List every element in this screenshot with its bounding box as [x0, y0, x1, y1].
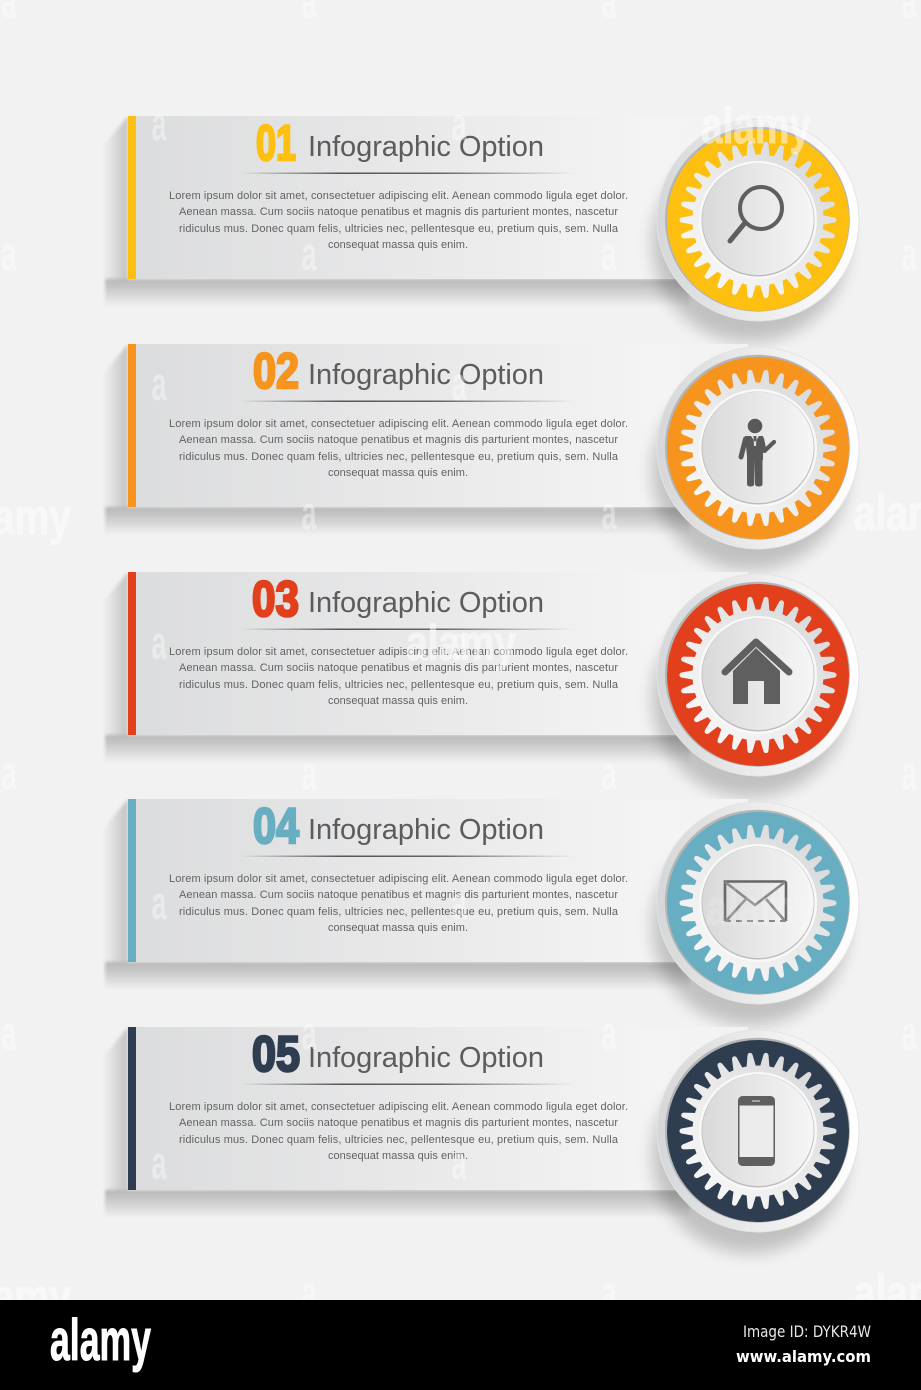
watermark letters: a — [2, 227, 17, 280]
watermark letters: a — [602, 746, 617, 799]
accent bar 1 — [128, 116, 136, 279]
row 5 — [103, 1026, 859, 1253]
accent bar 4 — [128, 799, 136, 962]
number 01: 01 — [256, 115, 296, 171]
body text 5: Lorem ipsum dolor sit amet, consectetuer adipiscing elit. Aenean commodo ligula eget dolor. — [169, 1101, 628, 1113]
panel: card 3 — [128, 572, 748, 735]
watermark words: alamy — [706, 880, 816, 936]
body text 3: consequat massa quis enim. — [328, 695, 468, 707]
row 3 — [103, 571, 859, 797]
panel: card 1 — [128, 116, 748, 279]
accent bar 5 — [128, 1027, 136, 1190]
watermark words: alamy — [406, 615, 516, 671]
row 2 — [103, 343, 859, 570]
watermark letters: a — [452, 616, 467, 669]
row 1 — [103, 115, 859, 342]
watermark letters: a — [152, 357, 167, 410]
watermark letters: a — [152, 97, 167, 150]
body text 1 — [169, 190, 628, 251]
body text 3: Lorem ipsum dolor sit amet, consectetuer adipiscing elit. Aenean commodo ligula eget dolor. — [169, 646, 628, 658]
watermark letters: a — [302, 1266, 317, 1319]
body text 4: ridiculus mus. Donec quam felis, ultricies nec, pellentesque eu, pretium quis, sem. Nulla — [179, 906, 619, 918]
body text 1: Lorem ipsum dolor sit amet, consectetuer adipiscing elit. Aenean commodo ligula eget dolor. — [169, 190, 628, 202]
watermark letters: a — [602, 486, 617, 539]
gear badge 3 — [652, 574, 859, 797]
gear badge 2 — [652, 347, 859, 570]
watermark letters: a — [152, 1136, 167, 1189]
watermark letters: a — [302, 1006, 317, 1059]
body text 2 — [169, 418, 628, 479]
icon: envelope — [725, 882, 786, 921]
number 03: 03 — [252, 571, 299, 627]
gear badge 4 — [652, 802, 859, 1025]
body text 4 — [169, 873, 628, 934]
icon: house — [725, 642, 789, 704]
number 04: 04 — [253, 798, 299, 854]
panel: card 4 — [128, 799, 748, 962]
divider 5 — [240, 1084, 575, 1085]
watermark letters: a — [302, 486, 317, 539]
watermark letters: a — [152, 876, 167, 929]
icon: businessman — [741, 419, 774, 486]
body text 5 — [169, 1101, 628, 1162]
heading 4: Infographic Option — [308, 814, 544, 846]
body text 3 — [169, 646, 628, 707]
watermark letters: a — [602, 1266, 617, 1319]
watermark letters: a — [452, 876, 467, 929]
number 02: 02 — [253, 343, 299, 399]
divider 1 — [240, 172, 575, 174]
divider 4 — [240, 856, 575, 857]
body text 4: Aenean massa. Cum sociis natoque penatibus et magnis dis parturient montes, nascetur — [179, 889, 618, 901]
watermark letters: a — [452, 1136, 467, 1189]
icon: smartphone — [738, 1096, 775, 1166]
panel: card 2 — [128, 344, 748, 507]
panel: card 5 — [128, 1027, 748, 1190]
body text 5: Aenean massa. Cum sociis natoque penatibus et magnis dis parturient montes, nascetur — [179, 1117, 618, 1129]
icon: magnifying glass — [730, 187, 782, 241]
row 4 — [103, 798, 859, 1025]
watermark letters: a — [302, 227, 317, 280]
gear badge 1 — [652, 119, 859, 342]
body text 1: consequat massa quis enim. — [328, 239, 468, 251]
body text 3: ridiculus mus. Donec quam felis, ultricies nec, pellentesque eu, pretium quis, sem. Nulla — [179, 679, 619, 691]
body text 2: ridiculus mus. Donec quam felis, ultricies nec, pellentesque eu, pretium quis, sem. Nulla — [179, 451, 619, 463]
shadow: card 4 — [103, 799, 690, 990]
website: www.alamy.com — [736, 1347, 871, 1366]
watermark letters: a — [452, 357, 467, 410]
heading 5: Infographic Option — [308, 1042, 544, 1074]
gear badge 5 — [652, 1030, 859, 1253]
accent bar 2 — [128, 344, 136, 507]
shadow: card 3 — [103, 572, 690, 763]
watermark letters: a — [152, 616, 167, 669]
heading 2: Infographic Option — [308, 359, 544, 391]
watermark letters: a — [2, 1006, 17, 1059]
watermark letters: a — [602, 227, 617, 280]
heading 1: Infographic Option — [308, 131, 544, 163]
watermark letters: a — [602, 1006, 617, 1059]
body text 2: consequat massa quis enim. — [328, 467, 468, 479]
image id: Image ID: DYKR4W — [743, 1322, 871, 1341]
body text 5: ridiculus mus. Donec quam felis, ultricies nec, pellentesque eu, pretium quis, sem. Nulla — [179, 1134, 619, 1146]
watermark letters: a — [302, 746, 317, 799]
watermark letters: a — [2, 746, 17, 799]
footer bar — [0, 1300, 921, 1390]
body text 3: Aenean massa. Cum sociis natoque penatibus et magnis dis parturient montes, nascetur — [179, 662, 618, 674]
body text 1: ridiculus mus. Donec quam felis, ultricies nec, pellentesque eu, pretium quis, sem. Nulla — [179, 223, 619, 235]
shadow: card 1 — [103, 116, 690, 307]
accent bar 3 — [128, 572, 136, 735]
divider 3 — [240, 628, 575, 630]
watermark words: alamy — [701, 98, 811, 154]
shadow: card 5 — [103, 1027, 690, 1218]
divider 2 — [240, 400, 575, 402]
footer logo: alamy — [50, 1308, 151, 1373]
number 05: 05 — [252, 1026, 300, 1082]
body text 4: consequat massa quis enim. — [328, 922, 468, 934]
body text 1: Aenean massa. Cum sociis natoque penatibus et magnis dis parturient montes, nascetur — [179, 206, 618, 218]
body text 2: Lorem ipsum dolor sit amet, consectetuer adipiscing elit. Aenean commodo ligula eget dolor. — [169, 418, 628, 430]
heading 3: Infographic Option — [308, 587, 544, 619]
body text 4: Lorem ipsum dolor sit amet, consectetuer adipiscing elit. Aenean commodo ligula eget dolor. — [169, 873, 628, 885]
body text 5: consequat massa quis enim. — [328, 1150, 468, 1162]
watermark letters: a — [452, 97, 467, 150]
shadow: card 2 — [103, 344, 690, 535]
body text 2: Aenean massa. Cum sociis natoque penatibus et magnis dis parturient montes, nascetur — [179, 434, 618, 446]
